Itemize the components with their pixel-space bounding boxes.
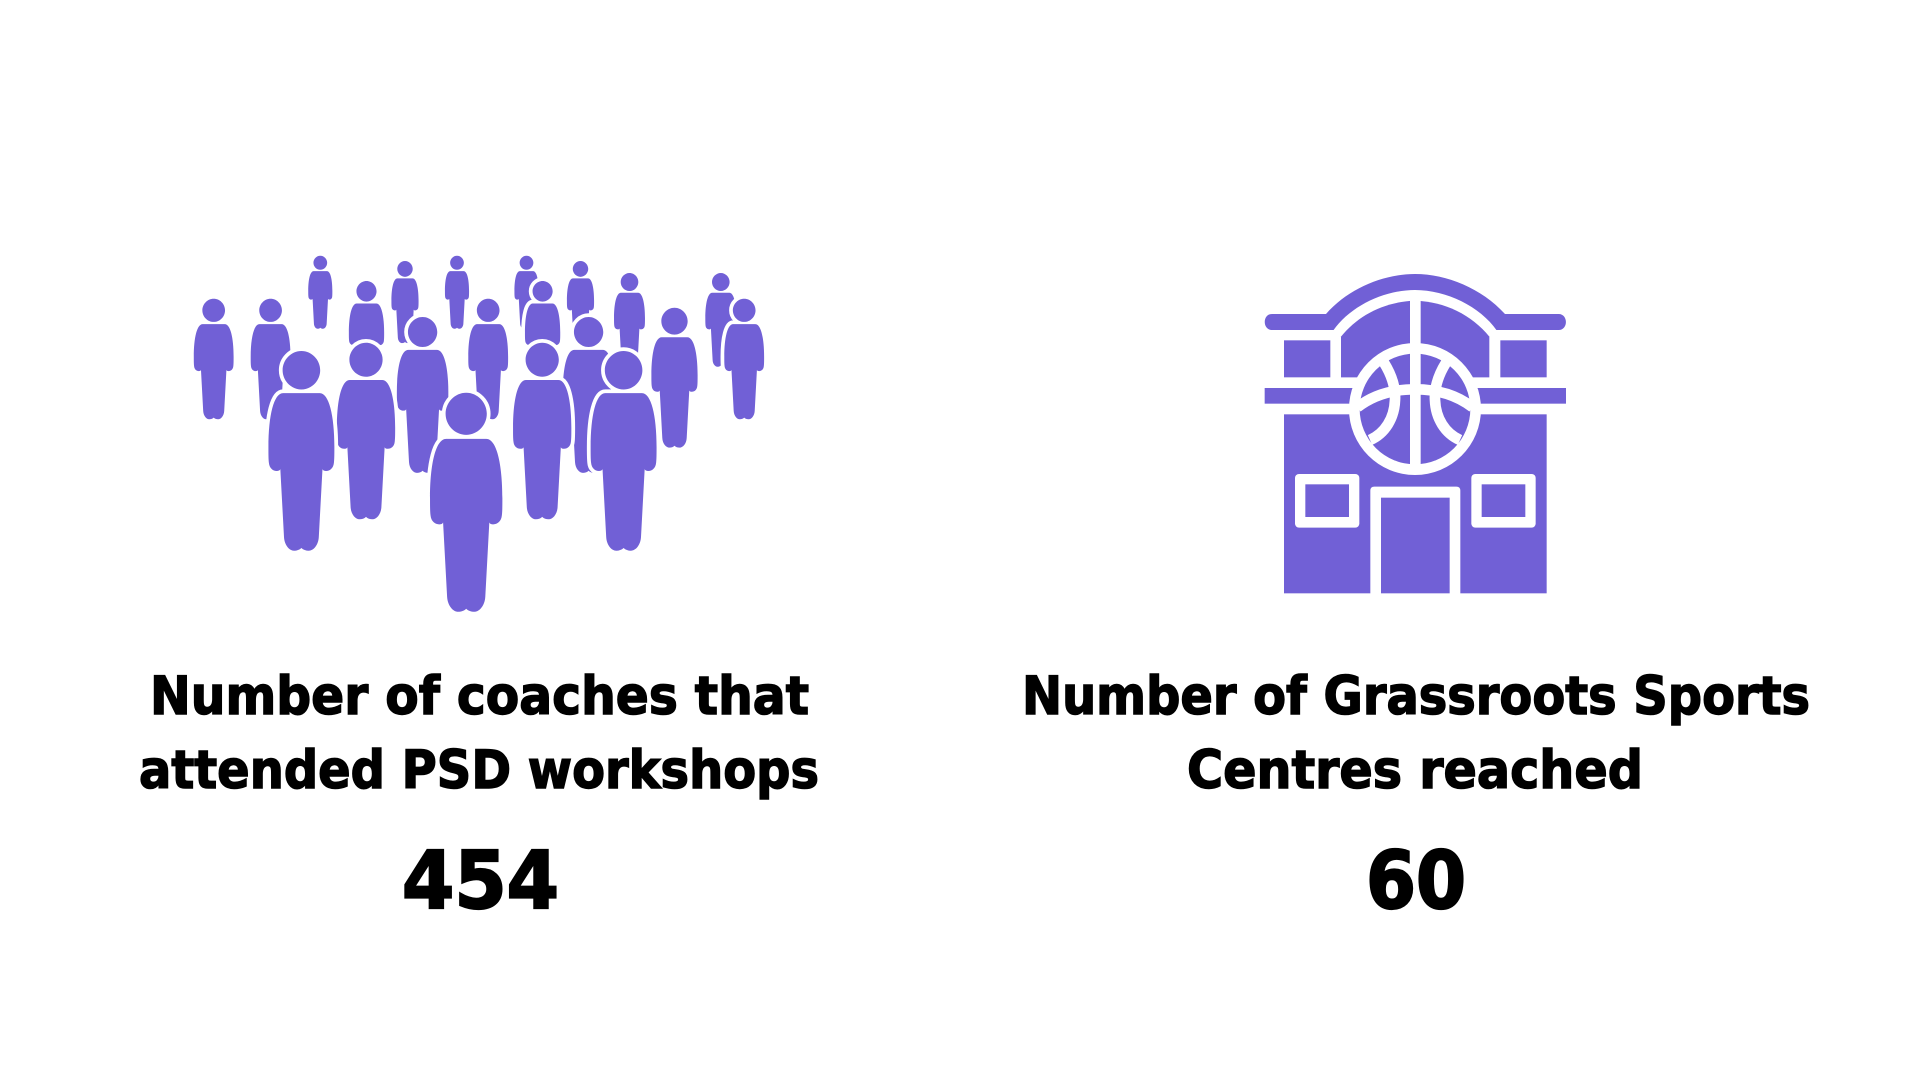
number: centres: 60 (1366, 835, 1466, 927)
person: middle row 6 (397, 317, 448, 473)
person: front row 4 (591, 351, 657, 551)
person: back row 9 (525, 281, 560, 388)
person: front centre (430, 393, 502, 612)
person: back row 1 (308, 256, 332, 329)
arched window panel (1341, 301, 1489, 377)
roof (1265, 274, 1566, 330)
window left (1295, 474, 1359, 528)
person: back row 3 (514, 256, 539, 329)
window right (1471, 474, 1536, 528)
door (1370, 487, 1460, 594)
basketball fill (1360, 354, 1470, 464)
person: middle row 5 (651, 308, 698, 448)
person: front row 3 (268, 351, 334, 551)
person: back row 2 (445, 256, 469, 329)
person: middle row 3 (468, 299, 508, 419)
icon: basketball sports centre building (1265, 274, 1566, 594)
side panel left (1284, 340, 1330, 377)
icon: crowd of people (194, 256, 764, 612)
person: back row 8 (349, 281, 384, 388)
person: middle row 7 (563, 317, 614, 473)
heading: coaches line 1: Number of coaches that (150, 666, 809, 727)
number: coaches: 454 (402, 835, 559, 927)
cornice band (1265, 388, 1566, 404)
person: middle row 1 (194, 299, 234, 419)
person: back row 7 (705, 273, 736, 367)
side panel right (1500, 340, 1547, 377)
basketball ring (1349, 343, 1481, 475)
heading: centres line 2: Centres reached (1187, 740, 1643, 801)
person: front row 2 (513, 343, 571, 519)
main building body (1284, 414, 1547, 593)
heading: coaches line 2: attended PSD workshops (139, 740, 819, 801)
person: back row 5 (567, 261, 594, 343)
basketball seams and window mullion (1357, 299, 1473, 468)
person: back row 4 (391, 261, 419, 343)
person: front row 1 (337, 343, 395, 519)
heading: centres line 1: Number of Grassroots Sports (1022, 666, 1810, 727)
person: middle row 4 (724, 299, 764, 419)
person: back row 6 (614, 273, 645, 367)
person: middle row 2 (251, 299, 291, 419)
white arch (1333, 290, 1497, 330)
